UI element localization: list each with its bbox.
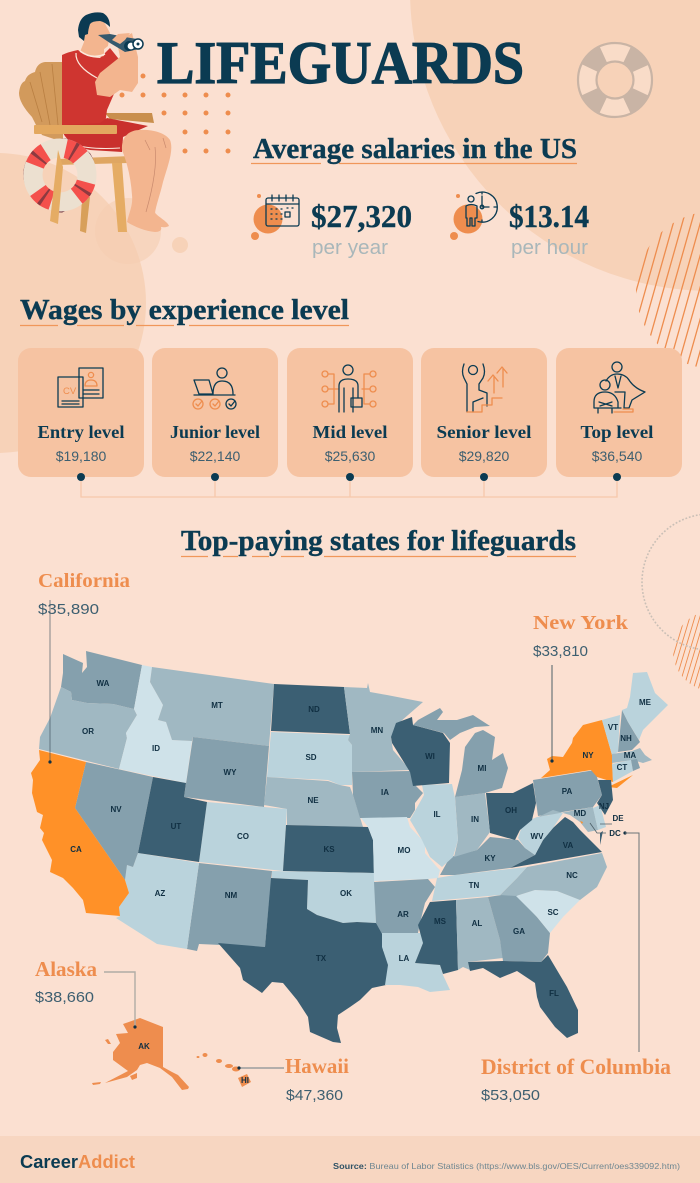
callout: Hawaii (237, 1054, 349, 1104)
map state labels: TX (316, 954, 327, 963)
icon: worker with skill nodes (322, 365, 376, 412)
map state labels: VT (608, 723, 618, 732)
source note: Source: Bureau of Labor Statistics (https://www.bls.gov/OES/Current/oes339092.htm) (333, 1161, 680, 1171)
map state labels: WV (531, 832, 544, 841)
map state labels: NC (566, 871, 578, 880)
map state labels: SD (305, 753, 317, 762)
panel: senior level: $29,820 (459, 448, 510, 464)
map state labels: DE (612, 814, 624, 823)
shirt (62, 48, 122, 125)
map state labels: NH (620, 734, 632, 743)
map state labels: MT (211, 701, 223, 710)
panel: senior level (421, 348, 547, 481)
map state labels: KY (484, 854, 496, 863)
stat: salary per year: per year (312, 237, 388, 259)
map state labels: CT (617, 763, 627, 772)
connector line between cards (81, 477, 617, 497)
panel: top level: Top level (580, 422, 654, 442)
icon: calendar (251, 194, 299, 240)
icon: climbing stairs with arrows (462, 364, 507, 412)
callout: California (38, 570, 130, 764)
panel: senior level: Senior level (436, 422, 532, 442)
face (84, 20, 110, 50)
callout: Alaska: Alaska (35, 957, 97, 981)
map state labels: CO (237, 832, 249, 841)
map state labels: ND (308, 705, 320, 714)
panel: mid level: $25,630 (325, 448, 376, 464)
front armrest (34, 125, 117, 134)
binoculars (98, 34, 139, 52)
panel: junior level (152, 348, 278, 481)
decorative orange dots (120, 74, 230, 154)
map state labels: LA (399, 954, 410, 963)
map: US states by wage (31, 651, 668, 1090)
seat and rear leg (57, 156, 132, 165)
map state labels: MD (574, 809, 586, 818)
map state labels: MA (624, 751, 636, 760)
map state labels: KS (323, 845, 335, 854)
map state labels: AR (397, 910, 409, 919)
map state labels: OR (82, 727, 94, 736)
callout: Hawaii: $47,360 (286, 1087, 343, 1104)
map state labels: NY (582, 751, 594, 760)
map state labels: IN (471, 815, 479, 824)
heading: top-paying states: Top-paying states for lifeguards (181, 525, 576, 557)
panel: junior level: Junior level (170, 422, 260, 442)
callout: District of Columbia: District of Columbia (481, 1054, 671, 1079)
map state labels: DC (609, 829, 621, 838)
stat: salary per hour (509, 198, 589, 259)
map state labels: PA (562, 787, 572, 796)
map state labels: HI (241, 1076, 249, 1085)
map state labels: WA (97, 679, 110, 688)
callout: New York (533, 612, 629, 763)
left chair leg (50, 150, 63, 224)
callout: California: $35,890 (38, 601, 99, 618)
map state labels: OH (505, 806, 517, 815)
icon: executives with cape (594, 362, 645, 413)
map state labels: IL (433, 810, 441, 819)
map state labels: VA (563, 841, 573, 850)
map state labels (70, 679, 652, 1085)
illustration: lifeguard on chair with binoculars (19, 12, 171, 233)
icon: lifebuoy watermark (578, 43, 652, 117)
heading: average salaries: Average salaries in the US (253, 133, 577, 165)
icon: clock and worker (450, 192, 497, 240)
heading: wages by experience level: Wages by experience level (20, 294, 349, 326)
chair back (19, 62, 63, 142)
neck and collar (80, 42, 104, 57)
shorts (63, 118, 148, 152)
panel: mid level: Mid level (312, 422, 388, 442)
callout: California: California (38, 570, 130, 592)
callout: Alaska: $38,660 (35, 989, 94, 1006)
map state labels: UT (171, 822, 181, 831)
callout: Hawaii: Hawaii (285, 1054, 349, 1078)
map state labels: AL (472, 919, 482, 928)
map state labels: SC (547, 908, 559, 917)
map state labels: NE (307, 796, 319, 805)
map state labels: NV (110, 805, 122, 814)
hair (78, 12, 110, 41)
map state labels: AK (138, 1042, 150, 1051)
footer band (0, 1136, 700, 1183)
panel: entry level (18, 348, 144, 481)
map state labels: IA (381, 788, 389, 797)
logo: CareerAddict: CareerAddict (20, 1152, 135, 1172)
map state labels: NM (225, 891, 238, 900)
callout: Alaska (35, 957, 137, 1029)
stat: salary per hour: $13.14 (509, 198, 589, 234)
map state labels: GA (513, 927, 525, 936)
callout: District of Columbia: $53,050 (481, 1087, 540, 1104)
map state labels: TN (469, 881, 480, 890)
map state labels: AZ (155, 889, 165, 898)
panel: entry level: Entry level (38, 422, 124, 442)
panel: top level (556, 348, 682, 481)
map state labels: WI (425, 752, 435, 761)
icon: CV documents: CV (63, 386, 77, 397)
title: LIFEGUARDS (157, 30, 524, 96)
icon: laptop worker (193, 368, 236, 409)
stat: salary per year (311, 198, 412, 259)
map state labels: OK (340, 889, 352, 898)
lifebuoy (22, 137, 98, 213)
callout: New York: $33,810 (533, 643, 588, 660)
panel: junior level: $22,140 (190, 448, 241, 464)
stat: salary per year: $27,320 (311, 198, 412, 234)
map state labels: MO (398, 846, 410, 855)
leg (122, 130, 171, 232)
arm (95, 33, 138, 97)
map state labels: WY (224, 768, 237, 777)
map state labels: NJ (599, 802, 609, 811)
map state labels: FL (549, 989, 559, 998)
map state labels: MN (371, 726, 383, 735)
callout: New York: New York (533, 612, 629, 634)
map state labels: ID (152, 744, 160, 753)
map state labels: MS (434, 917, 447, 926)
stat: salary per hour: per hour (511, 237, 588, 259)
panel: entry level: $19,180 (56, 448, 107, 464)
panel: top level: $36,540 (592, 448, 643, 464)
front chair leg (112, 163, 127, 232)
map state labels: ME (639, 698, 652, 707)
map state labels: MI (478, 764, 486, 773)
map state labels: CA (70, 845, 82, 854)
callout: District of Columbia (481, 823, 671, 1104)
panel: mid level (287, 348, 413, 481)
